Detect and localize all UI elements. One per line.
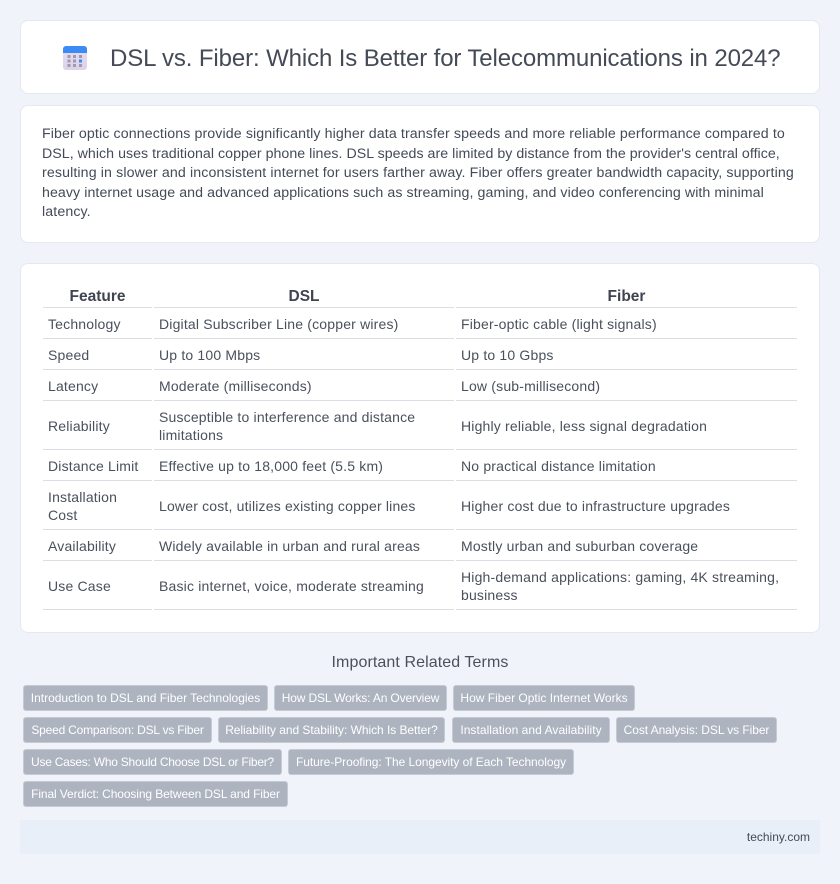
tag (616, 717, 777, 743)
tag (23, 685, 268, 711)
text: Technology (48, 316, 121, 332)
text: Cost (48, 507, 78, 523)
text: DSL (288, 288, 320, 305)
table header (43, 288, 797, 308)
tag: Reliability and Stability: Which Is Better? (225, 723, 438, 737)
text: Widely available in urban and rural areas (159, 538, 420, 554)
related term tags (23, 685, 777, 807)
footer source: techiny.com (747, 830, 810, 844)
text: Mostly urban and suburban coverage (461, 538, 698, 554)
text: Highly reliable, less signal degradation (461, 418, 707, 434)
row: speed (43, 347, 797, 370)
text: business (461, 587, 518, 603)
tag (23, 749, 282, 775)
tag: Introduction to DSL and Fiber Technologies (31, 691, 260, 705)
title: DSL vs. Fiber: Which Is Better for Telecommunications in 2024? (110, 45, 780, 72)
row: installation cost (43, 489, 797, 530)
row: technology (43, 316, 797, 339)
text: Latency (48, 378, 98, 394)
text: Up to 100 Mbps (159, 347, 260, 363)
comparison table card (20, 263, 820, 633)
text: Reliability (48, 418, 110, 434)
description card (20, 105, 820, 243)
row: use case (43, 569, 797, 610)
description text: resulting in slower and inconsistent internet for users farther away. Fiber offers greater bandwidth capacity, supporting (42, 165, 794, 181)
tag (23, 717, 212, 743)
text: Speed (48, 347, 89, 363)
text: Basic internet, voice, moderate streaming (159, 578, 424, 594)
text: Moderate (milliseconds) (159, 378, 312, 394)
tag: Installation and Availability (460, 723, 602, 737)
text: High-demand applications: gaming, 4K streaming, (461, 569, 779, 585)
tag: Cost Analysis: DSL vs Fiber (624, 723, 769, 737)
tag (274, 685, 447, 711)
text: Installation (48, 489, 117, 505)
text: Digital Subscriber Line (copper wires) (159, 316, 398, 332)
tag (218, 717, 445, 743)
row: availability (43, 538, 797, 561)
text: Effective up to 18,000 feet (5.5 km) (159, 458, 383, 474)
footer bar (20, 820, 820, 854)
tag: Future-Proofing: The Longevity of Each Technology (296, 755, 566, 769)
text: Susceptible to interference and distance (159, 409, 415, 425)
text: Up to 10 Gbps (461, 347, 554, 363)
row: latency (43, 378, 797, 401)
text: Low (sub-millisecond) (461, 378, 600, 394)
description text (42, 126, 794, 220)
tag (23, 781, 288, 807)
tag: Use Cases: Who Should Choose DSL or Fiber? (31, 755, 274, 769)
text: Feature (70, 288, 126, 305)
row: distance limit (43, 458, 797, 481)
text: Fiber-optic cable (light signals) (461, 316, 657, 332)
tag (453, 685, 635, 711)
related terms heading: Important Related Terms (332, 654, 508, 671)
text: No practical distance limitation (461, 458, 656, 474)
text: Distance Limit (48, 458, 138, 474)
text: Availability (48, 538, 116, 554)
text: limitations (159, 427, 223, 443)
text: Higher cost due to infrastructure upgrades (461, 498, 730, 514)
icon: calendar grid (63, 46, 87, 70)
tag (288, 749, 574, 775)
description text: DSL, which uses traditional copper phone lines. DSL speeds are limited by distance from the provider's central office, (42, 146, 780, 162)
description text: Fiber optic connections provide significantly higher data transfer speeds and more reliable performance compared to (42, 126, 785, 142)
description text: heavy internet usage and advanced applications such as streaming, gaming, and video conferencing with minimal (42, 184, 764, 200)
title card (20, 20, 820, 94)
text: Fiber (608, 288, 645, 305)
comparison table (43, 288, 797, 610)
tag: Speed Comparison: DSL vs Fiber (31, 723, 204, 737)
tag: Final Verdict: Choosing Between DSL and Fiber (31, 787, 280, 801)
text: Lower cost, utilizes existing copper lines (159, 498, 416, 514)
tag: How Fiber Optic Internet Works (460, 691, 628, 705)
description text: latency. (42, 204, 91, 220)
text: Use Case (48, 578, 111, 594)
tag (452, 717, 610, 743)
row: reliability (43, 409, 797, 450)
tag: How DSL Works: An Overview (282, 691, 439, 705)
